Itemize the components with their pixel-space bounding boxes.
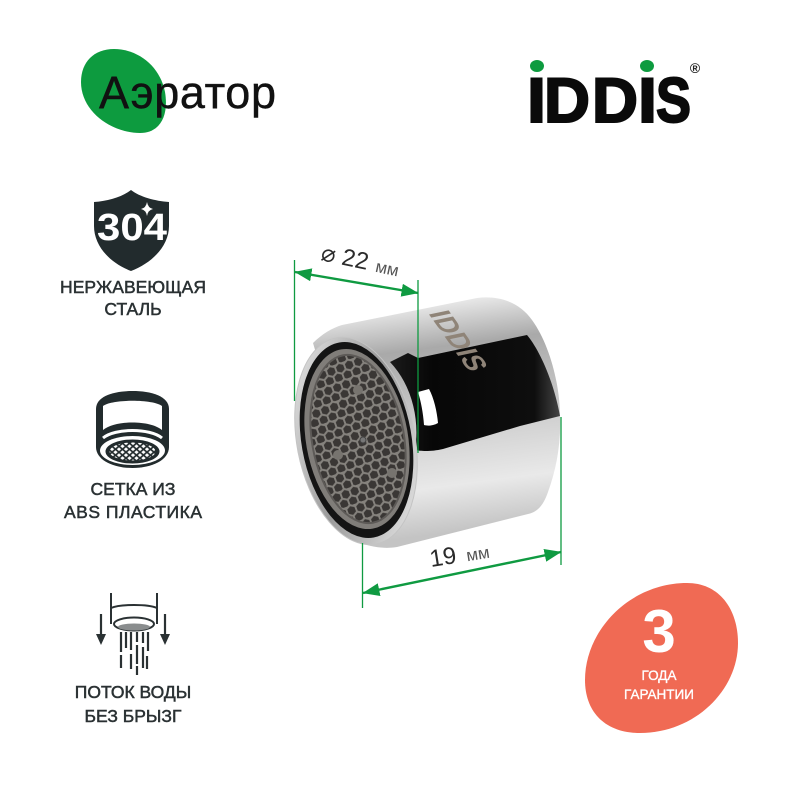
body logo: IDDIS: [422, 308, 495, 373]
logo wordmark: S: [656, 66, 691, 136]
honeycomb mesh: [299, 348, 417, 530]
warranty text: ГАРАНТИИ: [624, 687, 694, 702]
title: Аэратор: [81, 49, 276, 133]
logo wordmark: D: [544, 66, 590, 136]
green blob behind title: [81, 49, 166, 133]
logo wordmark: [527, 66, 691, 136]
icon: aerator mesh: [96, 391, 169, 468]
logo: IDDIS: [527, 60, 701, 136]
warranty text: ГОДА: [642, 668, 676, 683]
logo dot left: [530, 60, 544, 72]
logo wordmark: D: [592, 66, 638, 136]
extension lines: [362, 417, 561, 608]
arrow: [295, 272, 418, 293]
mesh solid spots: [333, 385, 397, 478]
extension lines: [294, 260, 418, 453]
front rim: [278, 327, 434, 555]
dimension: 19 mm: [362, 417, 561, 608]
dimension: 22 mm: [294, 239, 418, 453]
gray seal: [291, 341, 423, 537]
logo wordmark: I: [638, 66, 657, 136]
registered mark: ®: [690, 60, 701, 76]
title text: Аэратор: [99, 67, 276, 118]
product: aerator: [278, 297, 560, 555]
dimension label: 19 мм: [428, 537, 491, 573]
feature: stainless steel 304: [60, 190, 206, 319]
icon: shield 304: 304: [97, 207, 167, 249]
inner dark ring: [285, 333, 428, 547]
arrow: [363, 552, 561, 593]
aerator dark band: [390, 335, 560, 451]
logo dot right: [640, 60, 654, 72]
coral blob: [585, 583, 738, 733]
label: stainless steel: НЕРЖАВЕЮЩАЯ: [60, 277, 206, 297]
feature: ABS mesh: [64, 391, 202, 522]
icon: water flow: [96, 593, 170, 675]
feature: water flow: [75, 593, 191, 726]
label: water flow: БЕЗ БРЫЗГ: [85, 706, 182, 726]
reflection highlight: [418, 389, 438, 426]
warranty badge: [585, 583, 738, 733]
label: stainless steel: СТАЛЬ: [104, 299, 162, 319]
icon: shield 304: [94, 190, 169, 271]
aerator body: [313, 297, 560, 548]
label: water flow: ПОТОК ВОДЫ: [75, 682, 191, 702]
logo wordmark: I: [527, 66, 546, 136]
label: ABS mesh: СЕТКА ИЗ: [91, 479, 175, 499]
dimension label: ⌀ 22мм: [319, 239, 402, 282]
mesh centre: [360, 437, 366, 443]
warranty number: 3: [642, 598, 676, 665]
label: ABS mesh: ABS ПЛАСТИКА: [64, 502, 202, 522]
